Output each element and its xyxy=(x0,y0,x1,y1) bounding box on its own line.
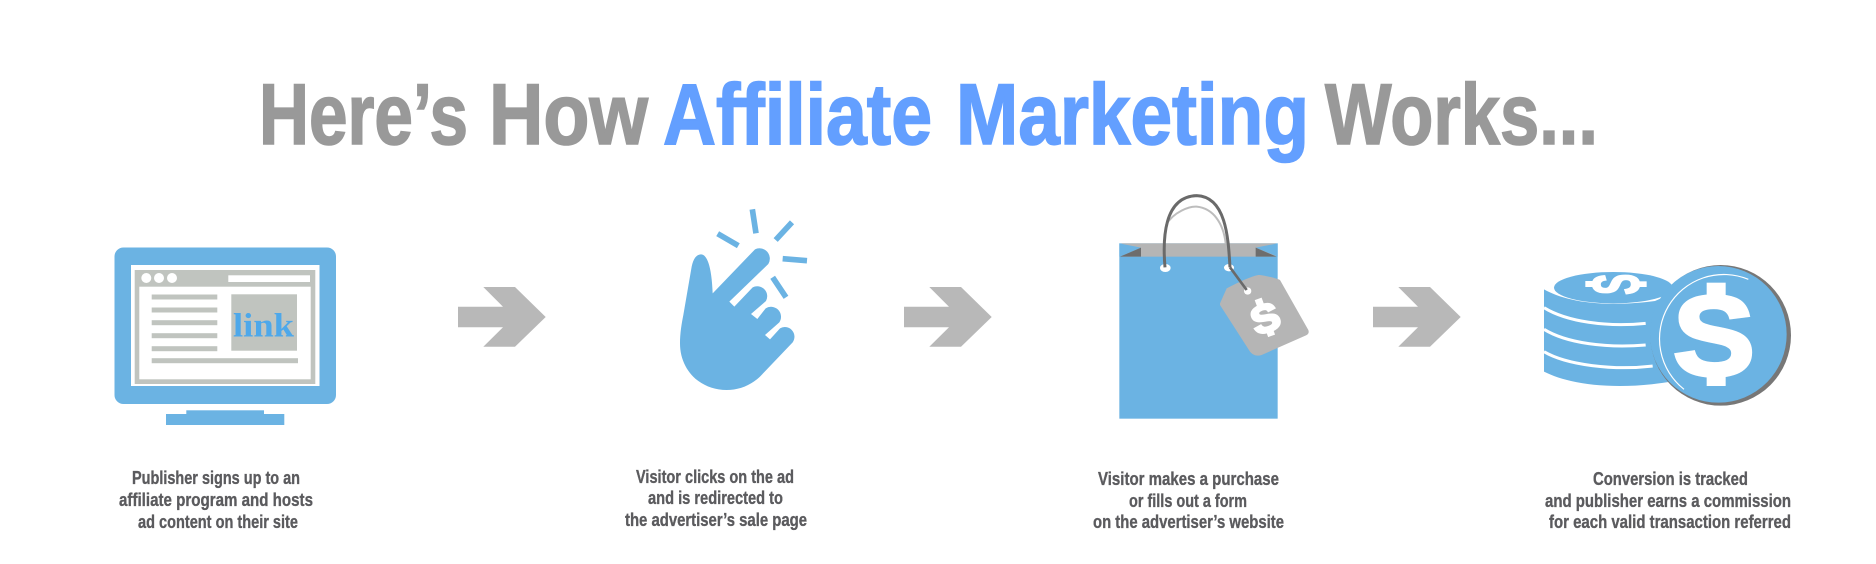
panel: commission step xyxy=(1544,265,1791,532)
icon: shopping bag with price tag xyxy=(1119,196,1309,419)
title: Here’s xyxy=(259,67,468,163)
title: Affiliate xyxy=(663,67,932,163)
arrow: step 3 to 4 xyxy=(1373,287,1461,347)
caption: publisher step: Publisher signs up to an xyxy=(132,467,300,488)
title xyxy=(259,67,1598,163)
arrow: step 2 to 3 xyxy=(904,287,992,347)
title: Marketing xyxy=(956,67,1309,163)
panel: purchase step xyxy=(1093,196,1309,532)
arrow: step 1 to 2 xyxy=(458,287,546,347)
caption: purchase step xyxy=(1093,468,1284,532)
caption: commission step: for each valid transaction referred xyxy=(1549,511,1791,532)
icon: clicking hand xyxy=(680,209,807,390)
title: Works... xyxy=(1325,67,1598,163)
panel: publisher step xyxy=(114,248,336,532)
caption: purchase step: on the advertiser’s website xyxy=(1093,511,1284,532)
panel: click step xyxy=(625,209,807,530)
caption: click step: the advertiser’s sale page xyxy=(625,509,807,530)
caption: click step xyxy=(625,466,807,530)
icon: computer monitor with link ad xyxy=(114,248,336,425)
icon: shopping bag with price tag: S xyxy=(1245,294,1286,344)
caption: commission step: Conversion is tracked xyxy=(1593,468,1748,489)
caption: publisher step: affiliate program and hosts xyxy=(119,489,313,510)
caption: commission step xyxy=(1545,468,1791,532)
icon: coin stack and dollar coin: S xyxy=(1580,274,1653,295)
caption: purchase step: or fills out a form xyxy=(1129,490,1247,511)
icon: computer monitor with link ad: link xyxy=(233,308,294,345)
caption: purchase step: Visitor makes a purchase xyxy=(1098,468,1279,489)
caption: click step: Visitor clicks on the ad xyxy=(636,466,794,487)
caption: publisher step xyxy=(119,467,313,532)
icon: coin stack and dollar coin xyxy=(1544,265,1791,406)
icon: coin stack and dollar coin: S xyxy=(1673,274,1755,400)
caption: click step: and is redirected to xyxy=(648,487,783,508)
caption: commission step: and publisher earns a commission xyxy=(1545,490,1791,511)
title: How xyxy=(489,67,649,163)
caption: publisher step: ad content on their site xyxy=(138,511,298,532)
